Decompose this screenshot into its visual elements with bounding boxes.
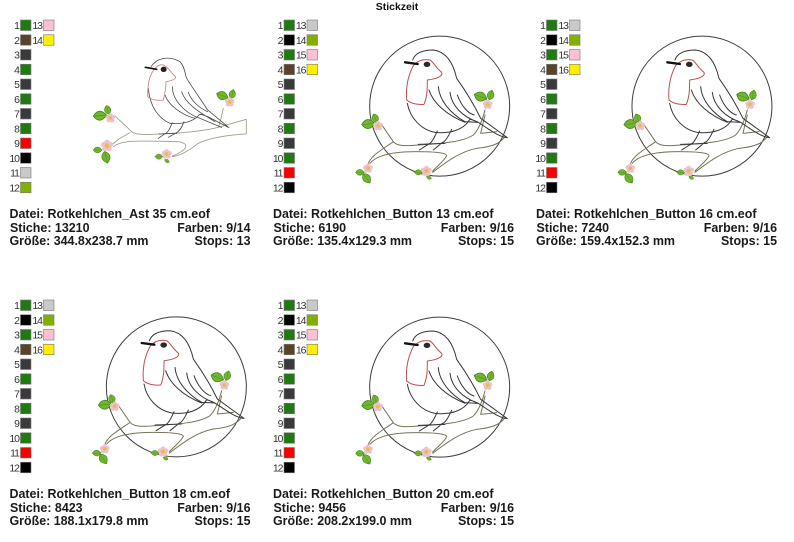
colour list: 15 xyxy=(296,330,307,342)
file info: Stops: 13 xyxy=(195,234,251,248)
embroidery: robin in circle xyxy=(356,317,510,466)
colour list: 1 xyxy=(14,300,20,312)
colour list: 15 xyxy=(32,330,43,342)
colour list: 10 xyxy=(9,153,20,165)
colour list: 6 xyxy=(540,94,546,106)
file info: Datei: Rotkehlchen_Button 20 cm.eof xyxy=(273,487,494,501)
colour list: 5 xyxy=(14,359,20,371)
colour list: 1 xyxy=(14,20,20,32)
colour list: 16 xyxy=(32,344,43,356)
colour list: 6 xyxy=(14,94,20,106)
file info: Farben: 9/16 xyxy=(177,501,251,515)
colour list: 4 xyxy=(540,64,546,76)
colour list: 10 xyxy=(273,433,284,445)
file info: Stops: 15 xyxy=(721,234,777,248)
colour list xyxy=(273,300,318,474)
colour list: 12 xyxy=(273,182,284,194)
colour list: 3 xyxy=(278,50,284,62)
colour list: 14 xyxy=(296,35,307,47)
file info: Farben: 9/16 xyxy=(441,501,514,515)
colour list: 12 xyxy=(9,182,20,194)
colour list: 2 xyxy=(14,315,20,327)
colour list: 7 xyxy=(278,108,284,120)
colour list: 7 xyxy=(14,388,20,400)
colour list: 4 xyxy=(14,64,20,76)
file info xyxy=(10,207,251,248)
colour list: 11 xyxy=(274,448,284,460)
colour list: 11 xyxy=(10,168,20,180)
colour list: 14 xyxy=(32,315,43,327)
colour list: 9 xyxy=(14,138,20,150)
file info: Stiche: 9456 xyxy=(274,501,346,515)
colour list: 10 xyxy=(535,153,546,165)
title: Stickzeit xyxy=(376,1,419,13)
colour list: 16 xyxy=(558,64,569,76)
colour list: 8 xyxy=(278,403,284,415)
colour list: 4 xyxy=(278,64,284,76)
file info: Größe: 208.2x199.0 mm xyxy=(273,514,412,528)
colour list xyxy=(535,20,580,194)
embroidery: robin in circle xyxy=(618,36,772,185)
embroidery: robin on branch xyxy=(93,58,246,164)
colour list: 12 xyxy=(535,182,546,194)
colour list: 9 xyxy=(540,138,546,150)
colour list: 3 xyxy=(278,330,284,342)
file info: Datei: Rotkehlchen_Button 16 cm.eof xyxy=(536,207,757,221)
file info: Datei: Rotkehlchen_Button 18 cm.eof xyxy=(10,487,231,501)
colour list: 2 xyxy=(540,35,546,47)
colour list: 1 xyxy=(278,20,284,32)
colour list: 2 xyxy=(278,315,284,327)
file info: Datei: Rotkehlchen_Button 13 cm.eof xyxy=(273,207,494,221)
panel: Button 18 cm xyxy=(9,300,251,528)
colour list: 13 xyxy=(296,300,307,312)
colour list: 9 xyxy=(278,418,284,430)
file info: Stops: 15 xyxy=(458,514,514,528)
colour list: 13 xyxy=(32,300,43,312)
panel: Button 13 cm xyxy=(273,20,514,248)
colour list: 8 xyxy=(540,123,546,135)
colour list: 4 xyxy=(278,344,284,356)
colour list: 10 xyxy=(273,153,284,165)
colour list: 4 xyxy=(14,344,20,356)
panel: Ast 35 cm xyxy=(9,20,251,248)
file info: Größe: 188.1x179.8 mm xyxy=(10,514,148,528)
colour list: 1 xyxy=(278,300,284,312)
colour list: 3 xyxy=(540,50,546,62)
colour list: 8 xyxy=(278,123,284,135)
file info xyxy=(10,487,251,528)
embroidery: robin in circle xyxy=(92,317,246,466)
file info: Stiche: 8423 xyxy=(10,501,83,515)
file info: Datei: Rotkehlchen_Ast 35 cm.eof xyxy=(10,207,211,221)
colour list: 12 xyxy=(273,462,284,474)
colour list: 6 xyxy=(278,94,284,106)
panel: Button 16 cm xyxy=(535,20,777,248)
colour list xyxy=(273,20,318,194)
colour list: 11 xyxy=(536,168,546,180)
colour list: 5 xyxy=(278,359,284,371)
file info: Größe: 159.4x152.3 mm xyxy=(536,234,675,248)
file info: Stops: 15 xyxy=(458,234,514,248)
colour list: 16 xyxy=(296,64,307,76)
colour list xyxy=(9,20,54,194)
colour list: 12 xyxy=(9,462,20,474)
colour list: 6 xyxy=(14,374,20,386)
colour list: 6 xyxy=(278,374,284,386)
colour list: 13 xyxy=(296,20,307,32)
file info: Stops: 15 xyxy=(195,514,251,528)
panel: Button 20 cm xyxy=(273,300,514,528)
file info: Stiche: 6190 xyxy=(274,221,346,235)
file info: Größe: 344.8x238.7 mm xyxy=(10,234,148,248)
colour list: 3 xyxy=(14,330,20,342)
colour list: 14 xyxy=(32,35,43,47)
colour list: 7 xyxy=(540,108,546,120)
colour list: 2 xyxy=(14,35,20,47)
file info: Farben: 9/16 xyxy=(441,221,514,235)
colour list: 13 xyxy=(558,20,569,32)
colour list: 13 xyxy=(32,20,43,32)
colour list: 14 xyxy=(296,315,307,327)
colour list: 7 xyxy=(14,108,20,120)
colour list: 15 xyxy=(296,50,307,62)
file info: Stiche: 7240 xyxy=(536,221,609,235)
colour list: 5 xyxy=(540,79,546,91)
colour list: 8 xyxy=(14,123,20,135)
colour list: 2 xyxy=(278,35,284,47)
file info xyxy=(536,207,777,248)
colour list: 9 xyxy=(14,418,20,430)
colour list: 11 xyxy=(274,168,284,180)
file info: Größe: 135.4x129.3 mm xyxy=(273,234,412,248)
colour list: 7 xyxy=(278,388,284,400)
colour list: 14 xyxy=(558,35,569,47)
file info xyxy=(273,207,514,248)
colour list xyxy=(9,300,54,474)
colour list: 10 xyxy=(9,433,20,445)
colour list: 5 xyxy=(278,79,284,91)
colour list: 1 xyxy=(540,20,546,32)
colour list: 15 xyxy=(558,50,569,62)
colour list: 11 xyxy=(10,448,20,460)
file info: Stiche: 13210 xyxy=(10,221,90,235)
embroidery: robin in circle xyxy=(356,36,510,185)
colour list: 16 xyxy=(296,344,307,356)
colour list: 8 xyxy=(14,403,20,415)
file info: Farben: 9/14 xyxy=(177,221,251,235)
file info xyxy=(273,487,514,528)
colour list: 3 xyxy=(14,50,20,62)
colour list: 5 xyxy=(14,79,20,91)
colour list: 9 xyxy=(278,138,284,150)
file info: Farben: 9/16 xyxy=(704,221,777,235)
